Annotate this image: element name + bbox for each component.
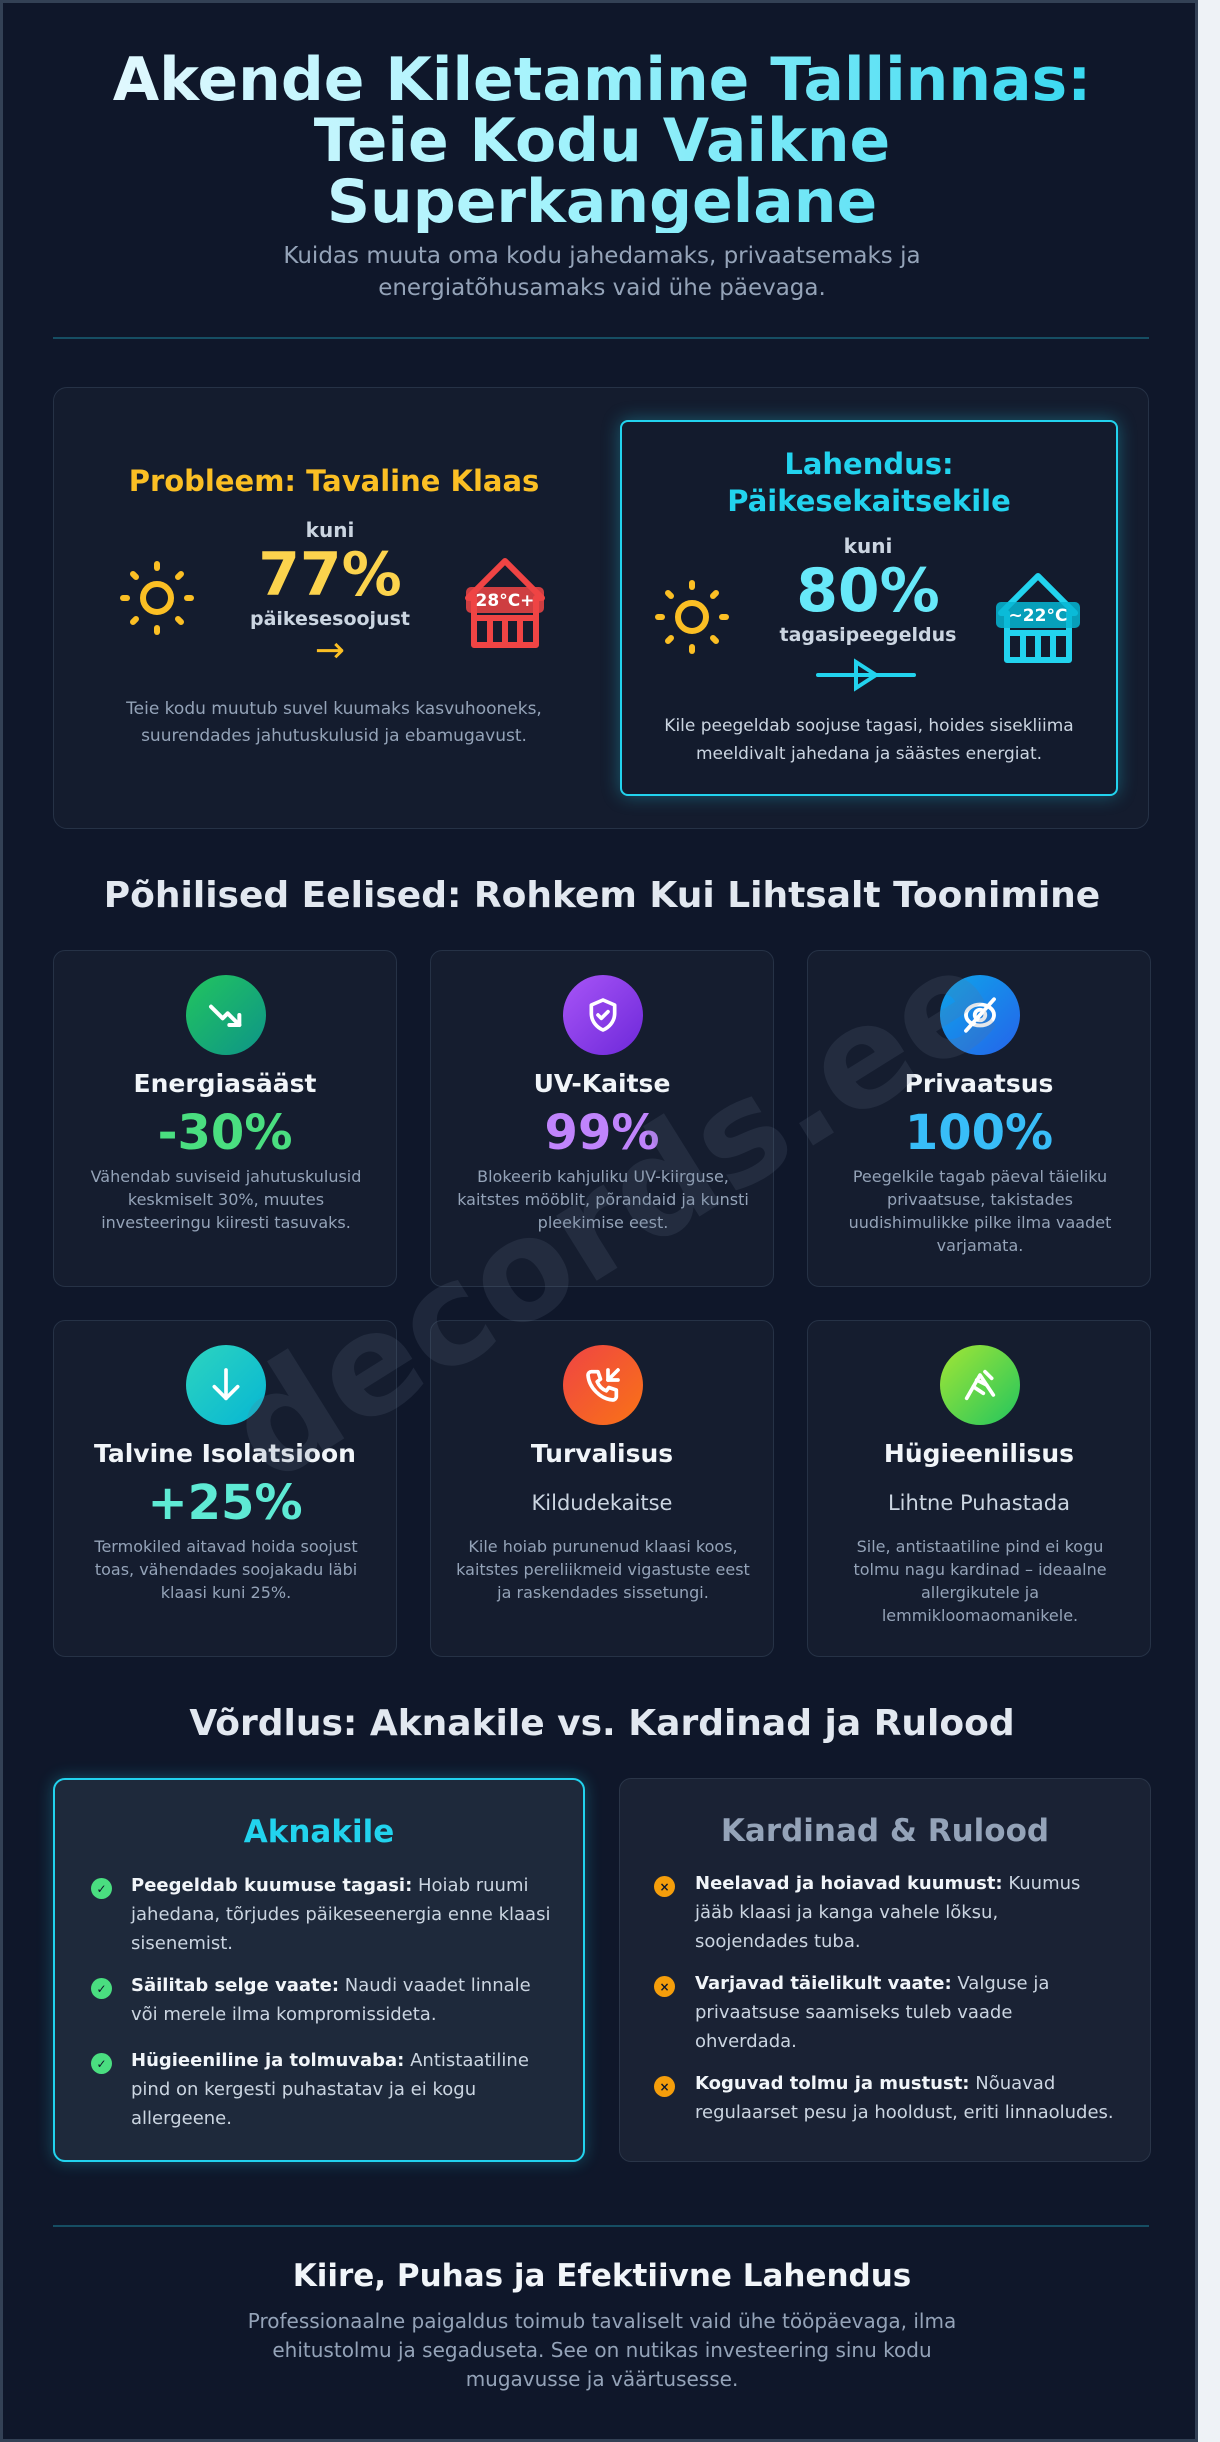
stat 77%: päikesesoojust	[250, 608, 410, 630]
item 3	[91, 2053, 112, 2074]
card: privacy: 100%	[905, 1105, 1053, 1161]
item 1	[91, 1878, 112, 1899]
title: Superkangelane	[327, 167, 877, 237]
item 2	[91, 1978, 112, 1999]
panel: aknakile: Peegeldab kuumuse tagasi: Hoiab ruumi jahedana, tõrjudes päikeseenergia enne klaasi sisenemist.	[131, 1875, 550, 1954]
panel: curtains	[619, 1778, 1151, 2162]
icon: cool house	[996, 573, 1080, 663]
solution heading: Päikesekaitsekile	[727, 484, 1011, 518]
subtitle: Kuidas muuta oma kodu jahedamaks, privaatsemaks ja	[283, 243, 921, 269]
item 2	[654, 1976, 675, 1997]
card: privacy: Privaatsus	[905, 1069, 1053, 1098]
item 3	[654, 2076, 675, 2097]
solution heading: Lahendus:	[784, 447, 954, 481]
card: privacy: Peegelkile tagab päeval täieliku privaatsuse, takistades uudishimulikke pilke ilma vaadet varjamata.	[849, 1167, 1111, 1255]
icon: hot house	[465, 558, 545, 648]
card: energy: Vähendab suviseid jahutuskulusid keskmiselt 30%, muutes investeeringu kiiresti tasuvaks.	[91, 1167, 361, 1232]
item 2: ×	[659, 1980, 670, 1994]
problem side	[120, 464, 545, 746]
panel: curtains: Varjavad täielikult vaate: Valguse ja privaatsuse saamiseks tuleb vaade ohverdada.	[695, 1973, 1049, 2052]
footer text: Professionaalne paigaldus toimub tavaliselt vaid ühe tööpäevaga, ilma ehitustolmu ja segaduseta. See on nutikas investeering sinu kodu mugavusse ja väärtusesse.	[248, 2309, 956, 2391]
card: hygiene: Hügieenilisus	[884, 1439, 1074, 1468]
solution description: Kile peegeldab soojuse tagasi, hoides sisekliima meeldivalt jahedana ja säästes energiat.	[664, 716, 1074, 764]
card: hygiene: Lihtne Puhastada	[888, 1491, 1070, 1515]
icon: arrow down	[186, 1345, 266, 1425]
title: Teie Kodu Vaikne	[314, 106, 890, 176]
panel: curtains: Neelavad ja hoiavad kuumust: Kuumus jääb klaasi ja kanga vahele lõksu, soojendades tuba.	[695, 1873, 1080, 1952]
card: UV: Blokeerib kahjuliku UV-kiirguse, kaitstes mööblit, põrandaid ja kunsti pleekimise eest.	[457, 1167, 749, 1232]
item 3: ×	[659, 2080, 670, 2094]
card: winter: Termokiled aitavad hoida soojust toas, vähendades soojakadu läbi klaasi kuni 25%.	[94, 1537, 358, 1602]
card: hygiene	[807, 1320, 1151, 1657]
stat 77%: 77%	[258, 540, 402, 610]
icon: eye off	[940, 975, 1020, 1055]
icon: cool house: ~22°C	[1009, 606, 1067, 626]
card: winter: +25%	[147, 1475, 303, 1531]
aknakile heading: Aknakile	[244, 1814, 394, 1850]
panel: problem vs solution	[53, 387, 1149, 829]
card: safety	[430, 1320, 774, 1657]
card: energy: Energiasääst	[134, 1069, 316, 1098]
curtains heading: Kardinad & Rulood	[721, 1813, 1049, 1849]
card: hygiene: Sile, antistaatiline pind ei kogu tolmu nagu kardinad – ideaalne allergikutele ja lemmikloomaomanikele.	[853, 1537, 1107, 1625]
stat 80%: kuni	[844, 534, 892, 558]
card: safety: Kildudekaitse	[532, 1491, 672, 1515]
card: energy: -30%	[158, 1105, 292, 1161]
card: winter: Talvine Isolatsioon	[94, 1439, 356, 1468]
panel: aknakile	[53, 1778, 585, 2162]
solution heading	[727, 447, 1011, 518]
solution box	[620, 420, 1118, 796]
title	[3, 50, 1201, 233]
stat 80%: 80%	[796, 556, 940, 626]
footer heading: Kiire, Puhas ja Efektiivne Lahendus	[293, 2258, 911, 2294]
panel: curtains: Koguvad tolmu ja mustust: Nõuavad regulaarset pesu ja hooldust, eriti linnaoludes.	[695, 2073, 1114, 2123]
item 1: ×	[659, 1880, 670, 1894]
problem heading: Probleem: Tavaline Klaas	[129, 464, 539, 498]
icon: sun	[655, 580, 729, 654]
stat 80%	[780, 534, 956, 646]
item 1	[654, 1876, 675, 1897]
card: winter	[53, 1320, 397, 1657]
watermark: decords.ee	[201, 915, 1025, 1514]
panel: aknakile: Säilitab selge vaate: Naudi vaadet linnale või merele ilma kompromissideta.	[131, 1975, 531, 2025]
item 3: ✓	[96, 2056, 107, 2070]
card: energy	[53, 950, 397, 1287]
icon: trending down	[186, 975, 266, 1055]
stat 77%: →	[315, 630, 345, 671]
heading: comparison: Võrdlus: Aknakile vs. Kardinad ja Rulood	[189, 1703, 1015, 1744]
stat 77%	[250, 518, 410, 671]
subtitle: energiatõhusamaks vaid ühe päevaga.	[378, 275, 826, 301]
icon: hot house: 28°C+	[476, 591, 534, 611]
item 2: ✓	[96, 1982, 107, 1996]
stat 80%: tagasipeegeldus	[780, 624, 956, 646]
item 1: ✓	[96, 1882, 107, 1896]
card: UV: 99%	[545, 1105, 659, 1161]
card: privacy	[807, 950, 1151, 1287]
icon: phone	[563, 1345, 643, 1425]
icon: shield	[563, 975, 643, 1055]
icon: sun	[120, 561, 194, 635]
heading: benefits: Põhilised Eelised: Rohkem Kui Lihtsalt Toonimine	[104, 875, 1100, 916]
card: UV: UV-Kaitse	[534, 1069, 670, 1098]
icon: sparkle broom	[940, 1345, 1020, 1425]
icon: reflect arrow	[816, 658, 916, 692]
card: UV	[430, 950, 774, 1287]
card: safety: Turvalisus	[531, 1439, 673, 1468]
title: Akende Kiletamine Tallinnas:	[113, 45, 1091, 115]
subtitle	[283, 243, 921, 301]
problem description: Teie kodu muutub suvel kuumaks kasvuhooneks, suurendades jahutuskulusid ja ebamugavust.	[126, 699, 542, 746]
card: safety: Kile hoiab purunenud klaasi koos, kaitstes pereliikmeid vigastuste eest ja raskendades sissetungi.	[456, 1537, 750, 1602]
panel: aknakile: Hügieeniline ja tolmuvaba: Antistaatiline pind on kergesti puhastatav ja ei kogu allergeene.	[131, 2050, 529, 2129]
stat 77%: kuni	[306, 518, 354, 542]
